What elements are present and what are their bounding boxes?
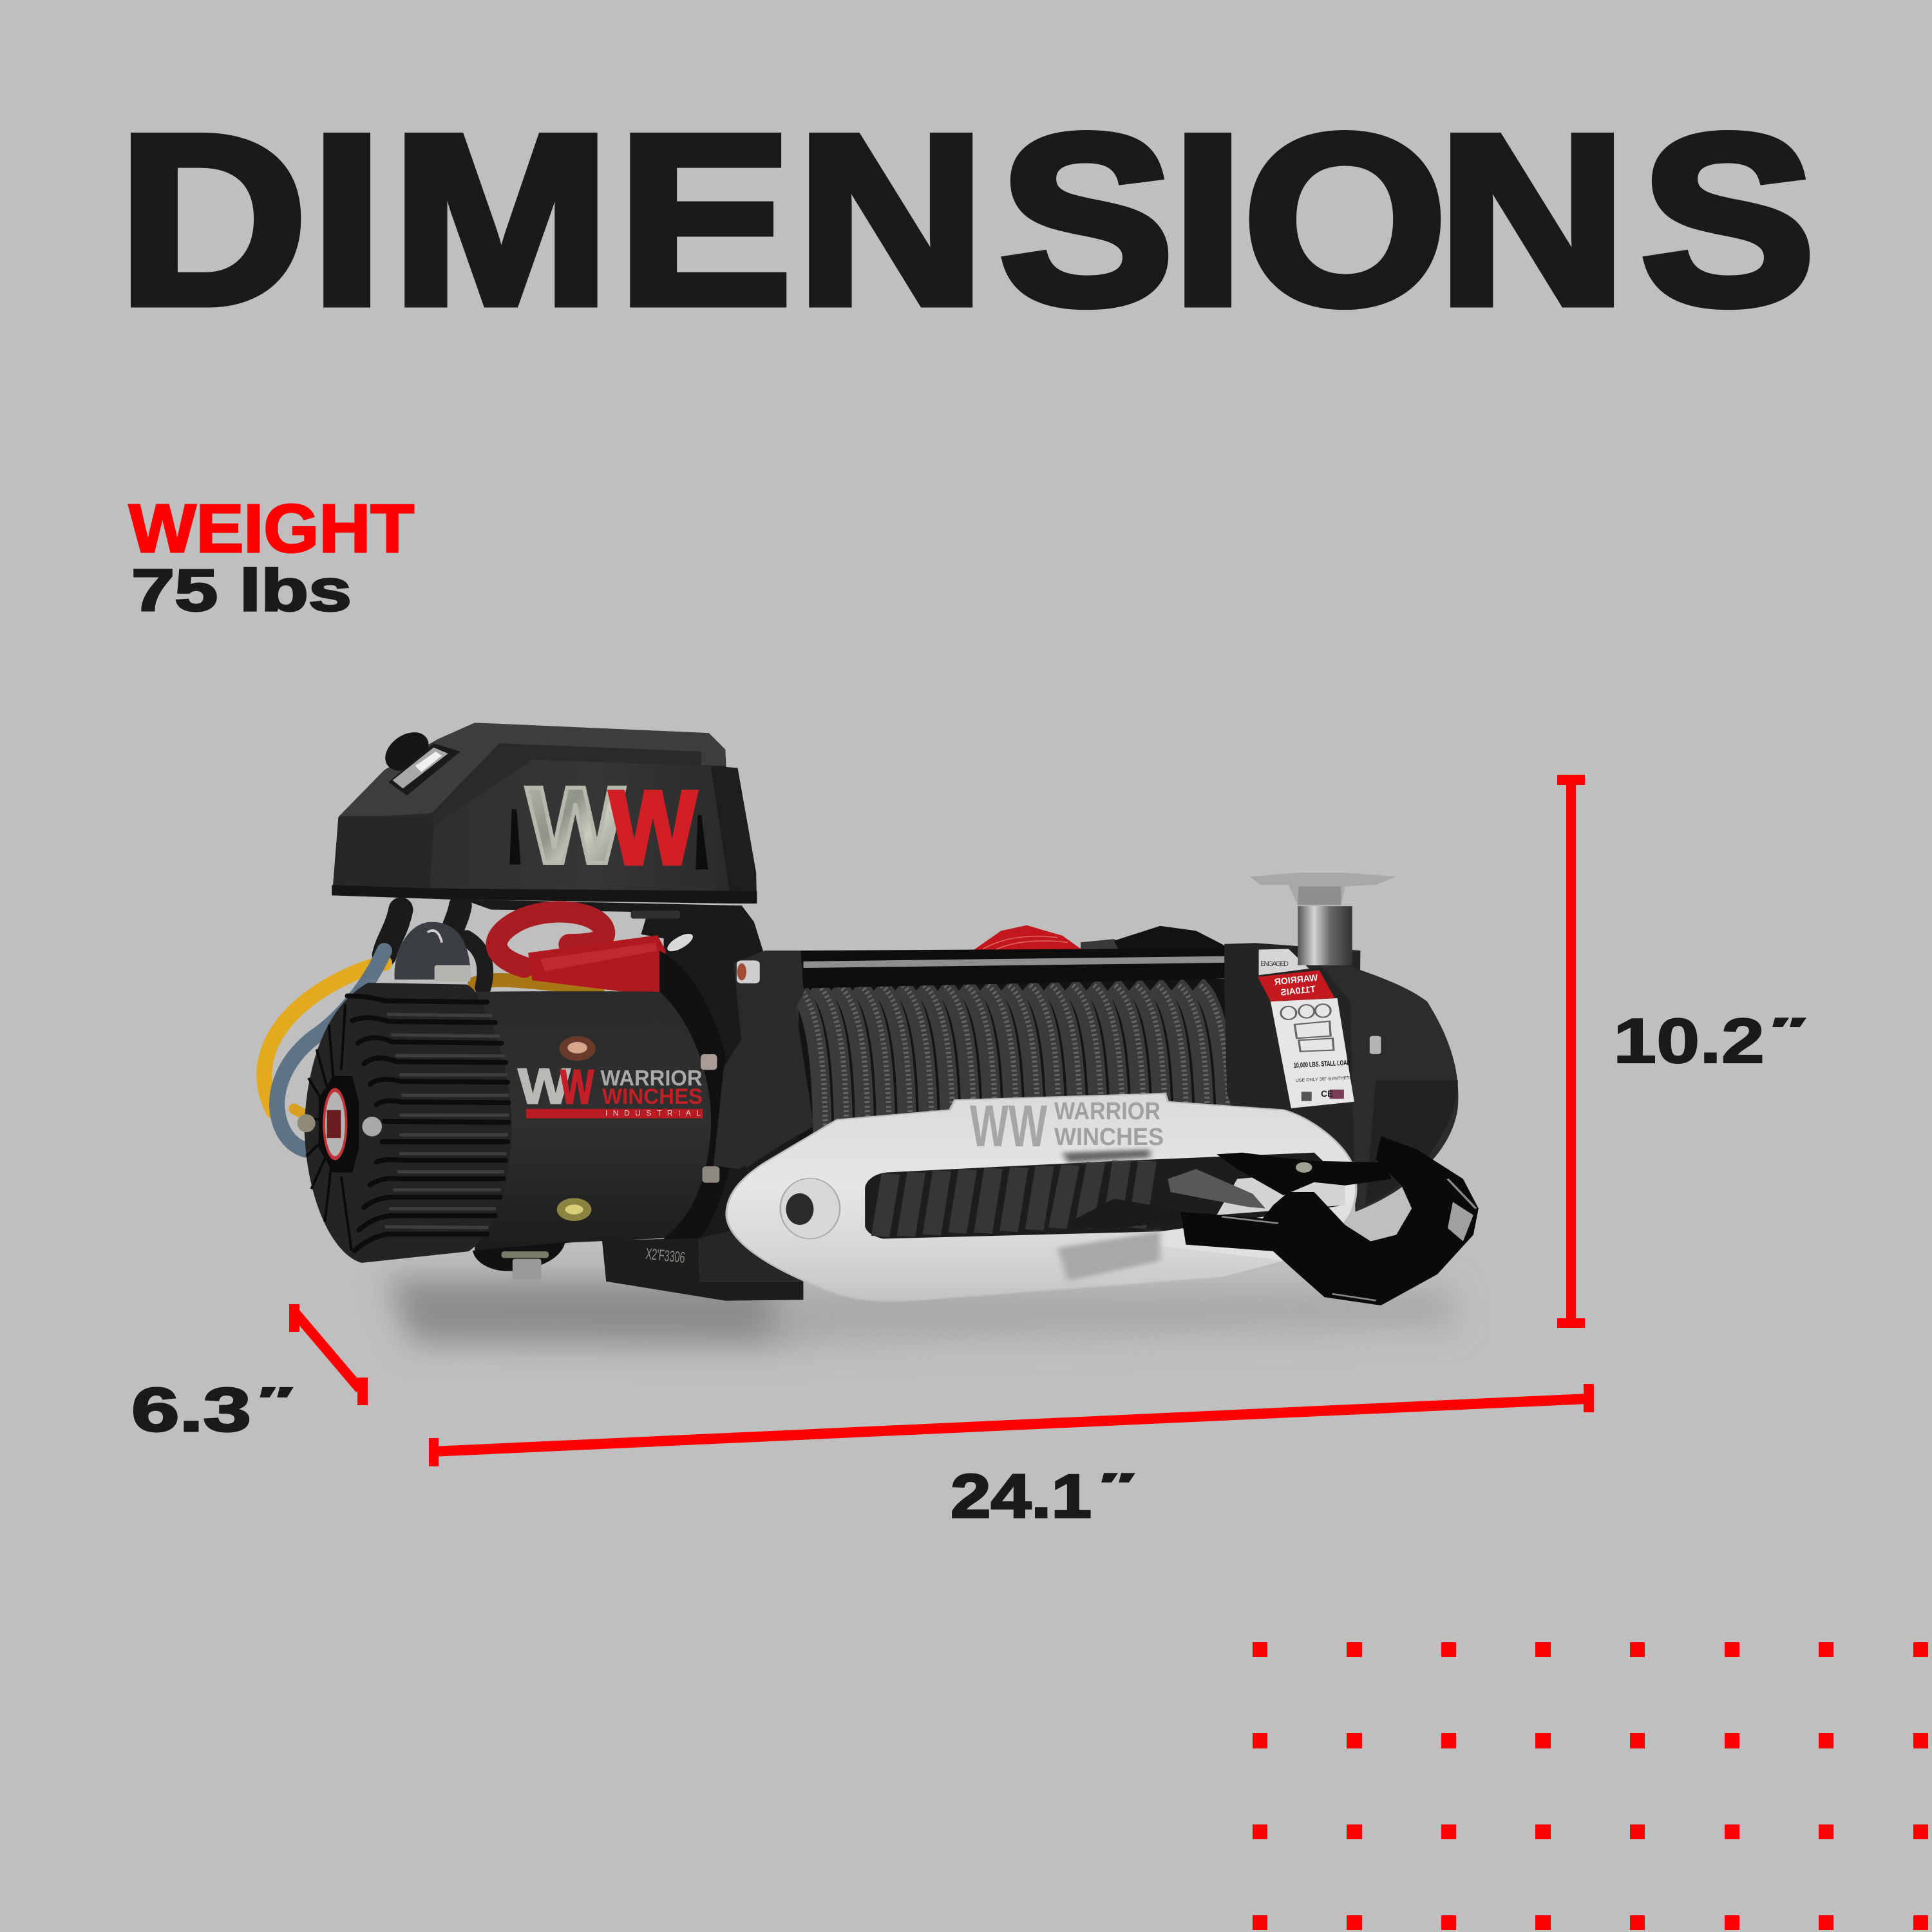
floor shadow <box>386 1278 1455 1346</box>
motor logo: WARRIOR <box>600 1066 703 1091</box>
dimension label: length: ″ <box>1100 1467 1135 1503</box>
mounting foot <box>602 1230 803 1301</box>
dimension label: height: 10.2 <box>1613 1005 1765 1076</box>
hawse fairlead <box>726 1094 1356 1301</box>
dimension label: length <box>951 1462 1135 1531</box>
dimension label: depth: 6.3 <box>131 1376 251 1444</box>
dimension label: length: 24.1 <box>951 1462 1092 1531</box>
slot with rope <box>865 1153 1345 1261</box>
fairlead logo: WW <box>970 1094 1047 1159</box>
dimension label: depth <box>131 1376 293 1444</box>
tie bar <box>800 948 1232 989</box>
motor logo: WINCHES <box>602 1084 703 1109</box>
flange left <box>714 951 813 1169</box>
motor body <box>473 951 734 1280</box>
switch <box>378 724 460 795</box>
motor logo: W <box>518 1059 571 1115</box>
weight label <box>129 491 414 623</box>
label text: 10,000 LBS. STALL LOAD <box>1294 1059 1350 1070</box>
motor end cap <box>298 983 512 1263</box>
cables <box>264 905 598 1150</box>
logo on box: W <box>609 770 697 886</box>
label text: T110AIS <box>1280 983 1316 998</box>
clutch knob <box>1250 873 1396 965</box>
dimension line: length <box>429 1384 1594 1466</box>
dimension label: height: ″ <box>1771 1012 1806 1048</box>
label text <box>1260 960 1368 1099</box>
control box <box>332 723 757 904</box>
rope tail <box>1070 1198 1183 1228</box>
terminals and bolts <box>557 959 773 1221</box>
fairlead logo: WINCHES <box>1054 1124 1164 1151</box>
dimension label: height <box>1613 1005 1806 1076</box>
fairlead logo <box>970 1094 1164 1159</box>
lower clamp <box>473 1242 565 1271</box>
rope drum <box>793 979 1236 1166</box>
dimension line: height <box>1557 775 1585 1328</box>
bracket under box <box>462 900 808 1238</box>
mounting foot: X2'F3306 <box>645 1245 686 1267</box>
label text: WARRIOR <box>1274 972 1318 987</box>
label <box>1258 971 1354 1108</box>
mounting hole <box>781 1179 840 1238</box>
gear collar <box>1224 943 1360 1166</box>
gear end cap <box>1309 951 1458 1212</box>
fairlead logo: WARRIOR <box>1054 1098 1160 1125</box>
motor logo: W <box>560 1060 594 1114</box>
cables and control box, motor <box>264 723 808 1301</box>
label text: ENGAGED <box>1260 960 1289 968</box>
title: DIMENSIONS <box>118 85 1815 355</box>
red dot grid <box>1253 1642 1928 1930</box>
label text: USE ONLY 3/8" SYNTHETIC ROPE <box>1296 1075 1368 1083</box>
dimension line: depth <box>289 1304 368 1405</box>
dimension label: depth: ″ <box>258 1379 293 1420</box>
terminal boot <box>395 922 471 981</box>
winch product illustration <box>264 723 1479 1346</box>
tie bar, flange and gear housing <box>714 873 1458 1212</box>
label text: CE <box>1321 1088 1333 1099</box>
logo on box: W <box>526 764 625 886</box>
fairlead reflections <box>1057 1150 1160 1281</box>
top strap and rope ends <box>973 925 1232 951</box>
hook <box>1168 1136 1479 1305</box>
logo on box <box>526 764 697 886</box>
red shackle boot <box>497 912 666 1006</box>
drum end flange <box>734 951 808 1168</box>
weight label: WEIGHT <box>129 491 414 567</box>
motor logo <box>518 1059 703 1119</box>
weight label: 75 lbs <box>131 558 352 623</box>
motor logo: INDUSTRIAL <box>605 1109 701 1118</box>
